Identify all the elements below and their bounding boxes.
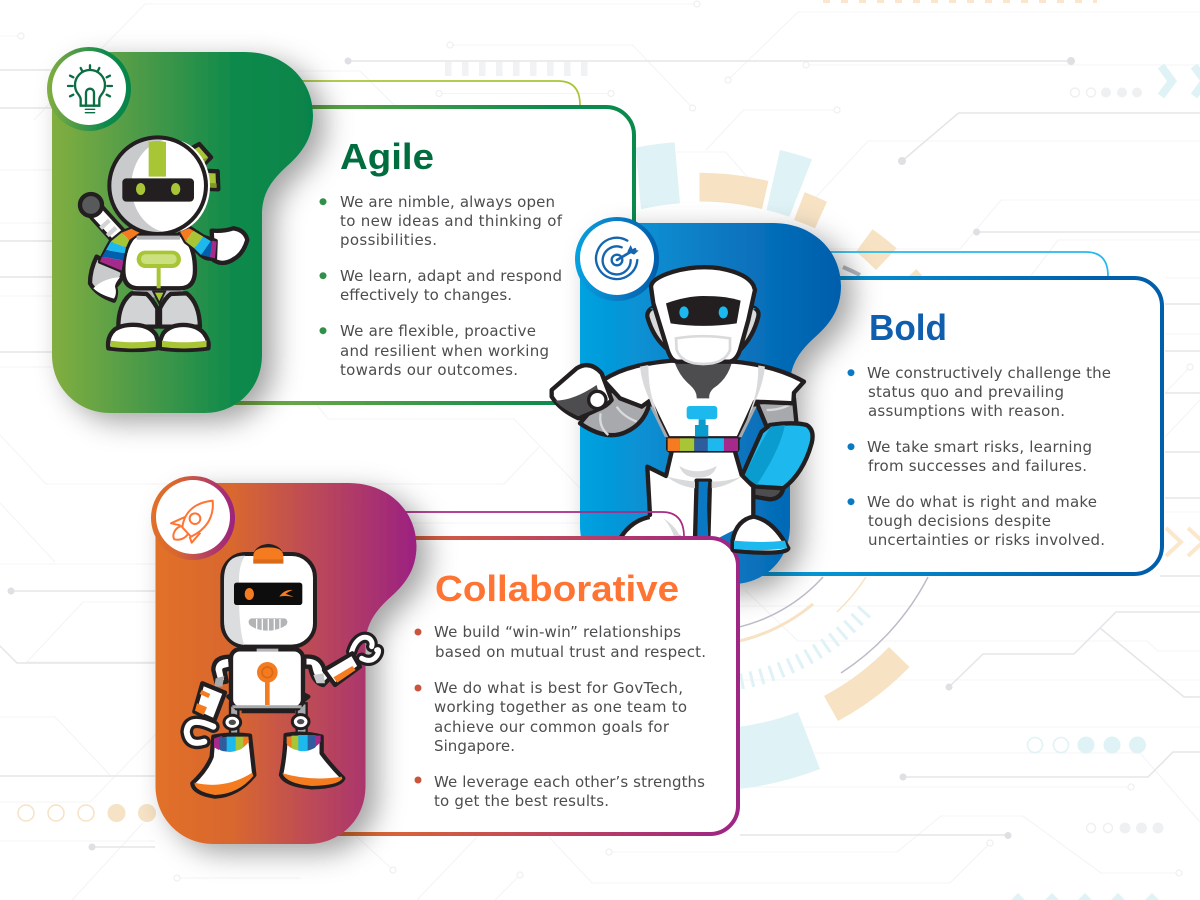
text block: Agile bullets: to new ideas and thinking of — [340, 212, 563, 230]
panel: Bold coloured blob — [580, 223, 841, 584]
robot: legs and hips — [618, 452, 753, 543]
robot: right sleeve and hand — [180, 227, 247, 263]
gauge: circular arcs behind the cards — [636, 142, 936, 791]
decorative dot row: orange left — [18, 804, 156, 822]
text block: Bold bullets: We take smart risks, learning — [867, 438, 1092, 456]
text block: Collaborative bullets: We build “win-win” relationships — [434, 623, 681, 641]
robot: raised fist — [552, 365, 612, 418]
text block: Bold bullets: uncertainties or risks involved. — [868, 531, 1105, 549]
robot: left boot — [192, 735, 254, 797]
text block: Agile bullets — [320, 193, 563, 379]
robot: body and shoulders — [580, 361, 804, 438]
text block: Collaborative bullets: We do what is best for GovTech, — [434, 679, 683, 697]
panel: Agile coloured blob — [52, 52, 313, 413]
decorative chevrons: orange right — [1166, 528, 1200, 556]
accent line: Bold — [823, 252, 1108, 276]
robot: right arm with claw — [304, 637, 379, 685]
text block: Collaborative bullets: working together as one team to — [434, 698, 687, 716]
text block: Agile bullets: and resilient when working — [340, 342, 549, 360]
panel: Collaborative card — [280, 538, 738, 834]
robot: raised antenna arm — [80, 194, 125, 243]
text block: Collaborative bullets — [414, 623, 706, 810]
robot: head — [647, 267, 759, 364]
text block: Bold bullets: status quo and prevailing — [868, 383, 1064, 401]
text block: Bold bullets: assumptions with reason. — [868, 402, 1065, 420]
decorative dot row: grey top right — [1070, 88, 1142, 98]
icon: rocket badge — [151, 476, 235, 560]
heading: Collaborative: Collaborative — [435, 568, 679, 609]
text block: Collaborative bullets: based on mutual trust and respect. — [435, 643, 706, 661]
text block: Collaborative bullets: achieve our common goals for — [434, 718, 670, 736]
heading: Bold: Bold — [869, 307, 947, 348]
robot: left arm with claw — [187, 657, 231, 743]
panel: Bold card — [700, 278, 1162, 574]
text block: Collaborative bullets: to get the best results. — [434, 792, 609, 810]
heading: Agile: Agile — [340, 136, 434, 177]
text block: Agile bullets: We are nimble, always open — [340, 193, 555, 211]
robot: head — [222, 546, 315, 647]
robot: torso — [228, 645, 308, 708]
text block: Bold bullets: tough decisions despite — [868, 512, 1051, 530]
robot: Collaborative mascot — [187, 546, 379, 797]
text block: Agile bullets: possibilities. — [340, 231, 437, 249]
robot: body — [123, 235, 195, 288]
panel: Agile card — [170, 107, 634, 403]
robot: Bold mascot right foot — [733, 517, 788, 553]
robot: chest emblem and rainbow belt — [666, 406, 740, 453]
robot: legs — [224, 703, 309, 740]
robot: head — [109, 137, 210, 240]
decorative dot row: grey lower right — [1086, 822, 1164, 834]
text block: Agile bullets: We learn, adapt and respond — [340, 267, 562, 285]
robot: right arm and shield — [740, 398, 813, 499]
text block: Bold bullets: We constructively challenge the — [867, 364, 1111, 382]
text block: Bold bullets — [848, 364, 1111, 549]
robot: Agile mascot — [80, 137, 247, 350]
text block: Bold bullets: We do what is right and make — [867, 493, 1097, 511]
text block: Agile bullets: towards our outcomes. — [340, 361, 518, 379]
robot: Bold mascot — [552, 267, 813, 543]
text block: Agile bullets: effectively to changes. — [340, 286, 512, 304]
decorative triangles: bottom edge — [1011, 893, 1159, 900]
robot: right boot — [281, 734, 343, 787]
text block: Collaborative bullets: Singapore. — [434, 737, 515, 755]
decorative dot row: cyan — [1028, 736, 1146, 754]
decorative chevrons: cyan top right — [1161, 66, 1200, 96]
robot: antennas — [192, 144, 218, 189]
robot: left sleeve and hand — [90, 229, 141, 301]
text block: Collaborative bullets: We leverage each other’s strengths — [434, 773, 705, 791]
icon: target badge — [575, 217, 659, 301]
text block: Bold bullets: from successes and failures. — [868, 457, 1087, 475]
accent line: Agile — [295, 81, 580, 105]
accent line: Collaborative — [399, 512, 684, 537]
robot: legs — [108, 288, 209, 350]
text block: Agile bullets: We are flexible, proactive — [340, 322, 536, 340]
panel: Collaborative coloured blob — [156, 483, 416, 844]
icon: light bulb badge — [47, 47, 131, 131]
